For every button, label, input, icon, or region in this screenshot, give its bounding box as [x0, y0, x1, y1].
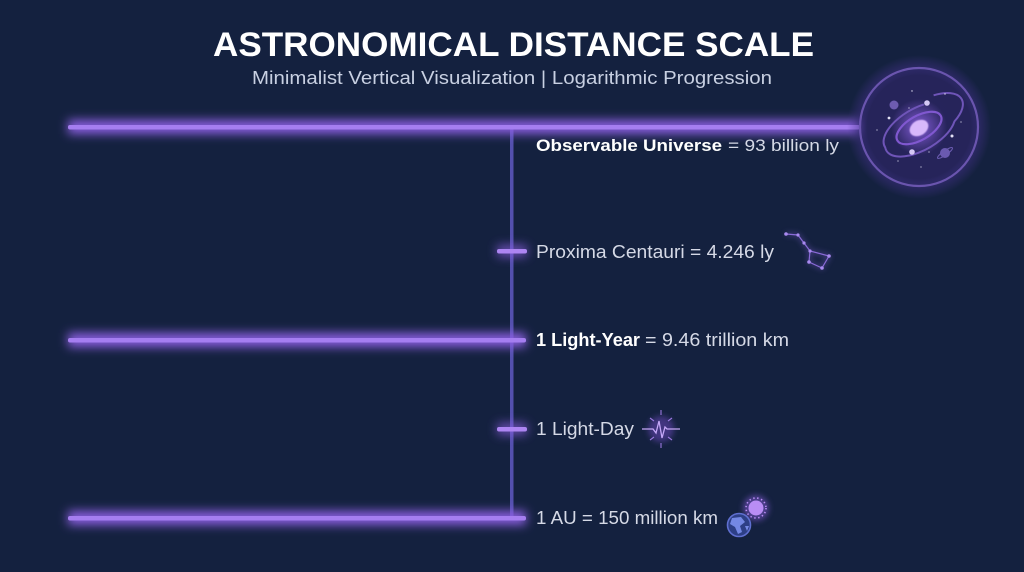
icon: light pulse [642, 410, 680, 448]
label: 1 light-day: 1 Light-Day [536, 419, 634, 439]
title: ASTRONOMICAL DISTANCE SCALE [213, 26, 814, 64]
vertical axis [510, 129, 514, 517]
label: observable universe [536, 136, 840, 155]
icon: sun and earth [728, 495, 769, 536]
bar: observable universe [68, 120, 860, 134]
tick: proxima centauri [497, 245, 527, 257]
icon: galaxy [847, 55, 991, 199]
subtitle: Minimalist Vertical Visualization | Logarithmic Progression [252, 68, 772, 88]
icon: constellation [784, 232, 831, 270]
label: 1 light-year: = 9.46 trillion km [645, 330, 789, 350]
label: observable universe: = 93 billion ly [728, 136, 840, 155]
label: proxima centauri: Proxima Centauri = 4.246 ly [536, 242, 774, 262]
label: 1 light-year: 1 Light-Year [536, 330, 640, 350]
bar: 1 AU [68, 511, 526, 525]
tick: 1 light-day [497, 423, 527, 435]
label: observable universe: Observable Universe [536, 136, 722, 155]
label: 1 light-year [536, 330, 789, 350]
bar: 1 light-year [68, 333, 526, 347]
label: 1 AU: 1 AU = 150 million km [536, 508, 718, 528]
